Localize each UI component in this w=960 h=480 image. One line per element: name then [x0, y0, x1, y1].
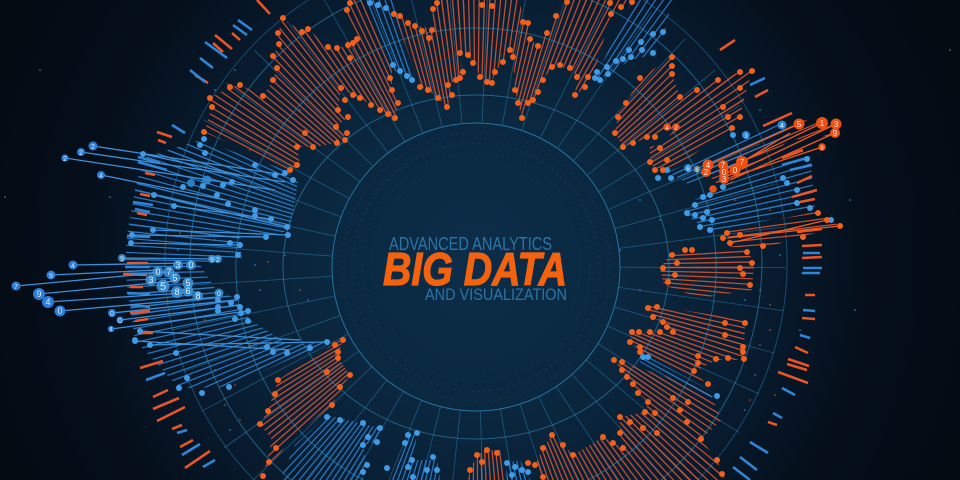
outer ball 0c: 0: [118, 318, 122, 325]
outer ball 4b: 4: [45, 297, 51, 307]
outer ball 9: [33, 288, 45, 300]
outer ball 7: 7: [14, 284, 18, 291]
inner cluster: 3: [175, 260, 181, 270]
orange radial data lines: [206, 0, 838, 480]
orange inner cluster: 3: [722, 175, 727, 184]
inner cluster: 9: [120, 256, 124, 263]
title: and visualization: AND VISUALIZATION: [425, 285, 567, 304]
outer ball 0b: 0: [110, 311, 114, 318]
small blue nodes: [131, 3, 831, 477]
outer ring orange bars: [123, 0, 822, 468]
outer ball 4b: [42, 296, 54, 308]
orange inner cluster: 7: [721, 161, 726, 170]
outer ball 0: 0: [57, 306, 63, 316]
orange inner cluster: 4: [665, 126, 669, 132]
inner cluster: 5: [160, 281, 166, 293]
outer ball 4c: [68, 260, 78, 270]
right orange burst lines: [708, 123, 840, 243]
outer ball 0c: [116, 316, 124, 325]
orange ball 5: 5: [797, 120, 802, 129]
grid spokes: [167, 0, 786, 480]
orange ball 8: [818, 143, 826, 152]
inner cluster: 8: [195, 291, 201, 301]
inner cluster: 2: [216, 257, 220, 264]
title: advanced analytics: ADVANCED ANALYTICS: [389, 234, 552, 254]
outer ball 2c: [61, 154, 69, 163]
title: big data: BIG DATA: [383, 243, 567, 295]
orange inner cluster: 0: [733, 166, 738, 175]
concentric grid rings: [165, 0, 787, 480]
tunnel of dim data points: [342, 133, 610, 401]
numbered orange nodes: [663, 117, 842, 193]
orange ball 1: 1: [820, 119, 825, 128]
orange inner cluster: [663, 123, 748, 193]
outer ball 4c: 4: [71, 263, 75, 270]
inner cluster: 8: [174, 287, 180, 297]
inner cluster: [118, 176, 224, 301]
small orange nodes: [204, 2, 840, 477]
orange ball 1: [816, 117, 828, 129]
outer ball 2: 2: [91, 144, 95, 151]
outer ball 8: 8: [110, 327, 113, 333]
orange ball 3: [830, 118, 842, 130]
inner cluster: 3: [148, 275, 154, 285]
orange ball 9: 9: [833, 129, 838, 138]
outer ball 8: [108, 326, 114, 333]
blue radial data lines: [125, 0, 815, 480]
outer ball 2b: [77, 148, 85, 157]
blue top-right balls: 6: [686, 167, 690, 173]
orange inner cluster: 2: [704, 168, 709, 177]
outer ball 2b: 2: [79, 150, 83, 157]
inner cluster: 0: [188, 260, 194, 270]
outer ball 9b: [46, 270, 56, 280]
outer ball 4: 4: [99, 173, 103, 180]
outer ball 2: [88, 142, 98, 151]
orange inner cluster: 7: [740, 158, 745, 167]
orange inner cluster: 4: [706, 161, 711, 170]
orange inner cluster: 0: [722, 168, 727, 177]
inner cluster: 5: [185, 278, 191, 288]
inner cluster: 9: [210, 257, 214, 264]
orange inner cluster: 2: [674, 126, 678, 132]
inner cluster: 7: [166, 267, 172, 277]
blue top-right balls: 6: [695, 168, 699, 174]
outer ball 9b: 9: [49, 273, 53, 280]
scattered particles: [5, 50, 950, 430]
inner cluster: 0: [217, 291, 221, 298]
inner cluster: 6: [185, 286, 191, 296]
blue top-right balls: 4: [780, 123, 784, 130]
orange ball 8: 8: [820, 146, 824, 152]
outer ball 2c: 2: [63, 156, 67, 163]
outer ball 4: [97, 171, 105, 180]
outer ball 0b: [108, 309, 116, 318]
blue top-right balls: 3: [744, 134, 748, 140]
orange ball 5: [794, 118, 804, 130]
outer ball 9: 9: [36, 289, 42, 299]
orange ball 9: [830, 128, 840, 138]
outer ball 7: [12, 282, 20, 291]
outer ball 0: [54, 306, 66, 316]
left blue burst lines: [16, 146, 327, 350]
numbered blue nodes: [12, 142, 224, 333]
orange ball 3: 3: [834, 120, 839, 129]
inner cluster: 5: [172, 273, 178, 283]
blue top-right balls: [684, 120, 786, 174]
inner cluster: 0: [155, 267, 161, 277]
outer ring blue bars: [125, 20, 822, 480]
